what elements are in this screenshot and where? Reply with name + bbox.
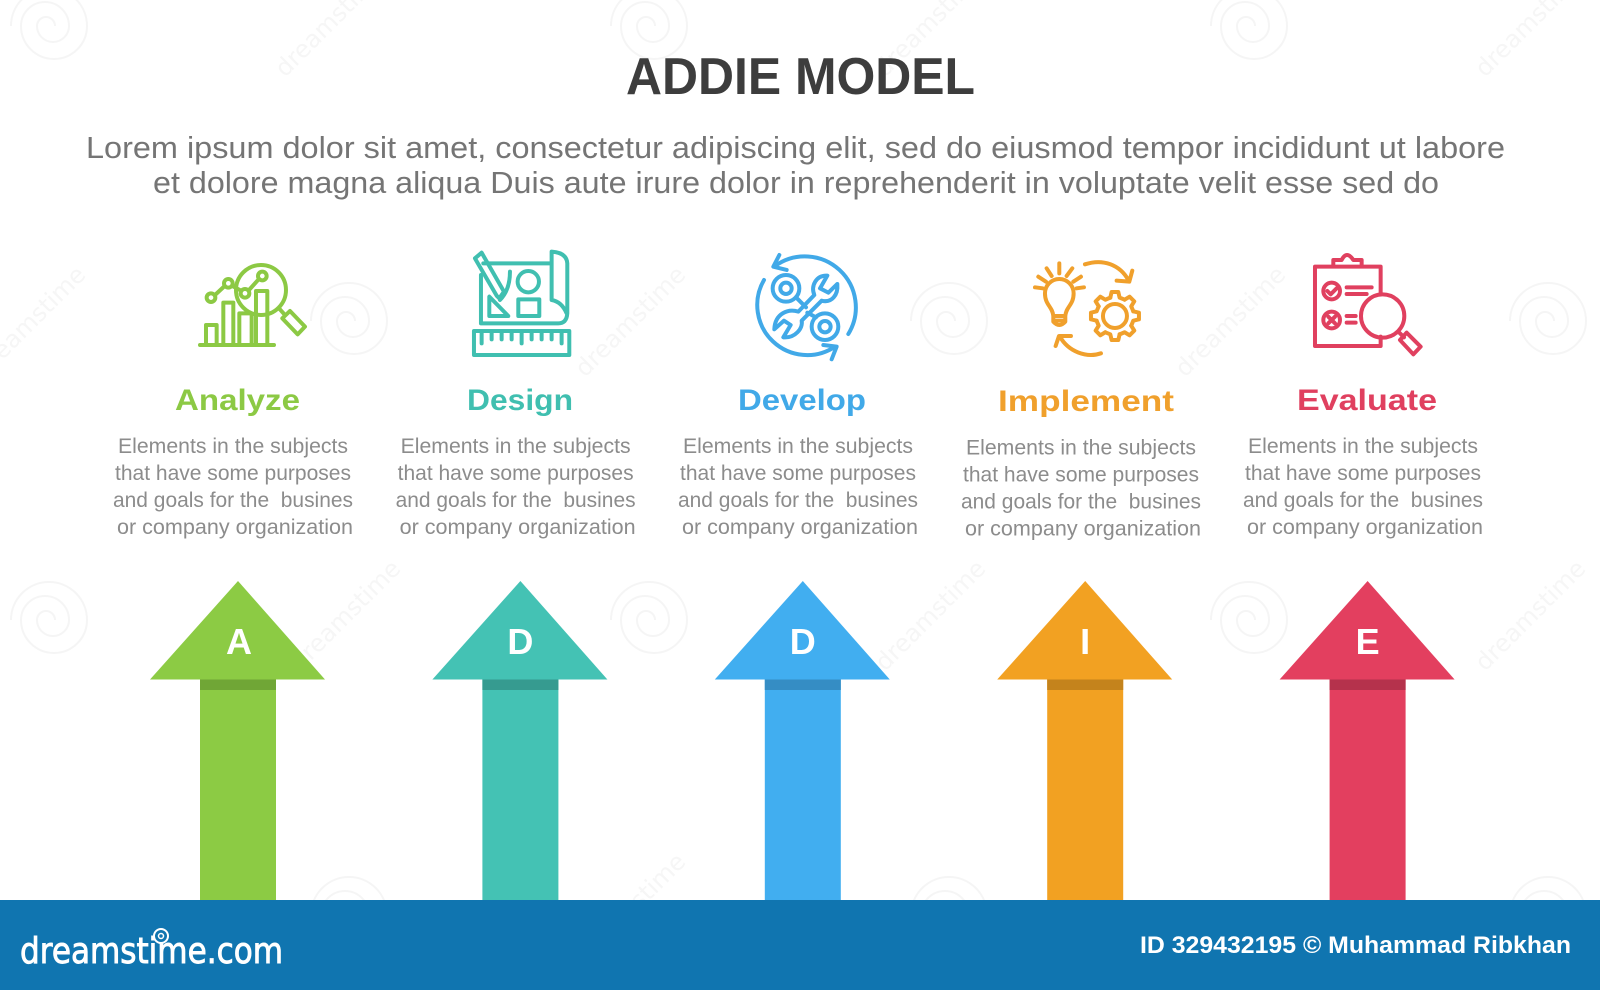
- description: or company organization: [117, 516, 353, 539]
- arrow: A: [150, 581, 325, 900]
- description: that have some purposes: [398, 462, 634, 485]
- description: [396, 435, 636, 539]
- heading: Evaluate: Evaluate: [1297, 384, 1437, 417]
- description: and goals for the busines: [113, 489, 353, 512]
- arrow: I: I: [1080, 621, 1090, 662]
- icon: crossed wrenches in cycle: [757, 255, 856, 359]
- intro paragraph: [86, 130, 1505, 200]
- description: Elements in the subjects: [118, 435, 348, 458]
- infographic canvas: dreamstime: [1169, 261, 1291, 382]
- description: and goals for the busines: [961, 490, 1201, 514]
- heading: Design: Design: [467, 384, 573, 417]
- description: or company organization: [400, 516, 636, 539]
- logo: dreamstime.com: dreamstime.com: [20, 931, 283, 972]
- description: or company organization: [1247, 516, 1483, 539]
- description: [961, 436, 1201, 540]
- arrow: D: D: [790, 621, 816, 662]
- heading: Analyze: Analyze: [175, 384, 300, 417]
- panel: develop: [678, 255, 918, 900]
- description: that have some purposes: [1245, 462, 1481, 485]
- description: [1243, 435, 1483, 539]
- title: ADDIE MODEL: [626, 48, 975, 106]
- icon: clipboard with magnifier: [1315, 255, 1421, 354]
- description: that have some purposes: [963, 464, 1199, 486]
- intro paragraph: et dolore magna aliqua Duis aute irure dolor in reprehenderit in voluptate velit esse sed do: [153, 165, 1439, 200]
- infographic canvas: dreamstime: [1469, 555, 1591, 676]
- description: and goals for the busines: [1243, 489, 1483, 512]
- heading: Implement: Implement: [998, 385, 1174, 418]
- icon: bar chart with magnifier: [200, 265, 305, 345]
- panel: design: [396, 252, 636, 900]
- description: and goals for the busines: [678, 489, 918, 512]
- description: that have some purposes: [115, 462, 351, 485]
- arrow: D: D: [507, 621, 533, 662]
- description: or company organization: [682, 516, 918, 539]
- arrow: E: [1280, 581, 1455, 900]
- arrow: I: [997, 581, 1172, 900]
- icon: light bulb and gear cycle: [1035, 262, 1139, 355]
- description: Elements in the subjects: [401, 435, 631, 458]
- panel: analyze: [113, 265, 353, 900]
- description: Elements in the subjects: [683, 435, 913, 458]
- arrow: D: [432, 581, 607, 900]
- infographic canvas: dreamstime: [869, 555, 991, 676]
- arrow: D: [715, 581, 890, 900]
- description: that have some purposes: [680, 462, 916, 485]
- icon: blueprint and ruler: [474, 252, 569, 355]
- arrow: A: A: [226, 621, 252, 662]
- description: Elements in the subjects: [966, 436, 1196, 460]
- description: [113, 435, 353, 539]
- description: Elements in the subjects: [1248, 435, 1478, 458]
- panel: evaluate: [1243, 255, 1483, 900]
- arrow: E: E: [1356, 621, 1380, 662]
- image credit: ID 329432195 © Muhammad Ribkhan: [1140, 932, 1571, 959]
- description: [678, 435, 918, 539]
- infographic canvas: dreamstime: [284, 555, 406, 676]
- heading: Develop: Develop: [738, 384, 866, 417]
- description: or company organization: [965, 518, 1201, 540]
- panel: implement: [961, 262, 1201, 900]
- footer bar: [0, 900, 1600, 990]
- infographic canvas: dreamstime: [569, 261, 691, 382]
- intro paragraph: Lorem ipsum dolor sit amet, consectetur adipiscing elit, sed do eiusmod tempor incididunt ut labore: [86, 130, 1505, 165]
- infographic canvas: dreamstime: [569, 848, 691, 969]
- description: and goals for the busines: [396, 489, 636, 512]
